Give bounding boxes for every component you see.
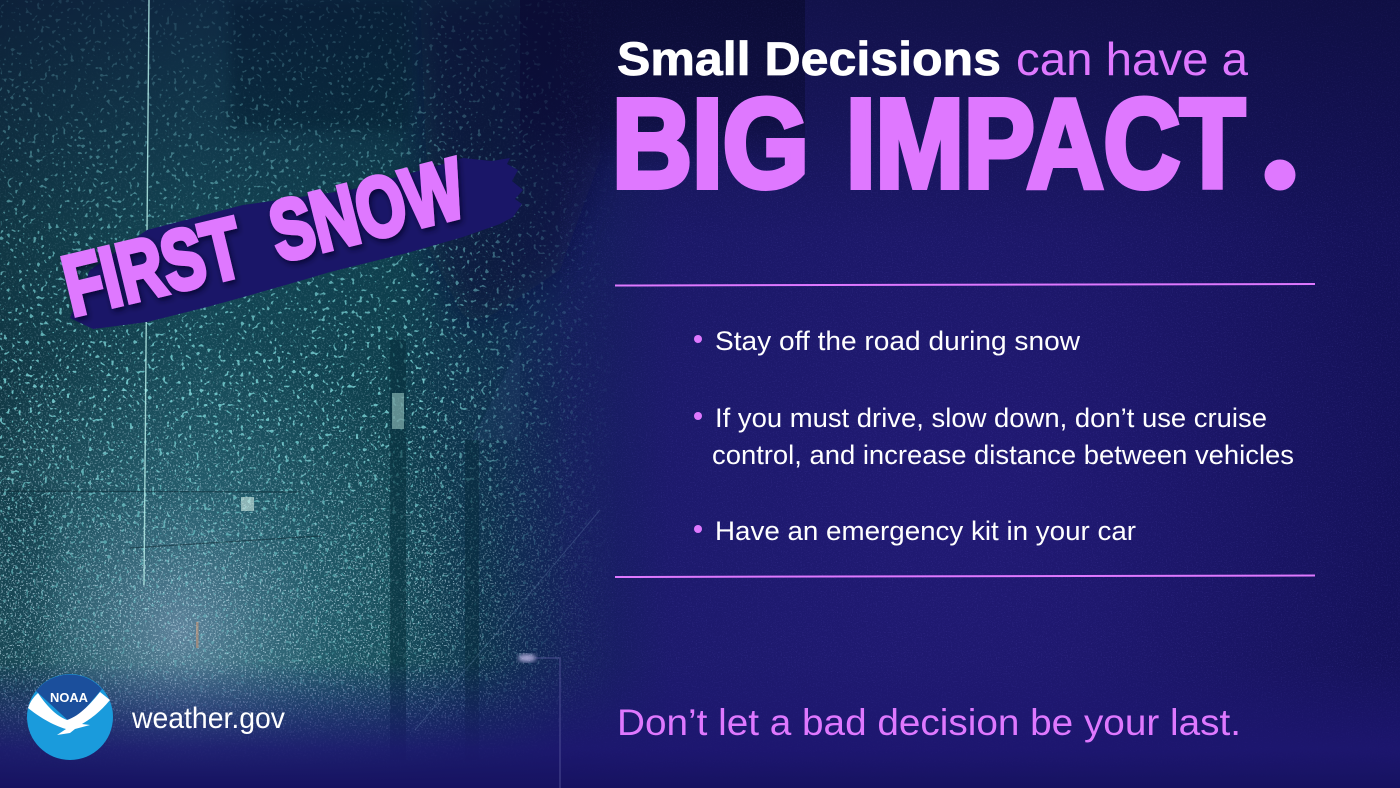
website: weather.gov (131, 702, 285, 735)
bullet 1: Stay off the road during snow (715, 326, 1081, 356)
noaa logo (27, 674, 113, 760)
closing message: Don’t let a bad decision be your last. (617, 702, 1241, 743)
noaa wordmark: NOAA (50, 690, 89, 705)
title line: can have a (1016, 33, 1248, 85)
title line: Small Decisions (617, 32, 1001, 85)
bottom divider (615, 576, 1315, 577)
bird swoosh (28, 692, 110, 735)
brush stroke (70, 158, 523, 329)
top divider (615, 284, 1315, 286)
big impact headline: BIG (612, 73, 809, 214)
title line (617, 32, 1248, 85)
bullet 2 (694, 403, 1294, 470)
first snow label: FIRST (54, 200, 252, 334)
bullet list (694, 326, 1294, 546)
big impact headline: IMPACT (846, 73, 1245, 214)
bullet 2: control, and increase distance between vehicles (712, 440, 1294, 470)
first snow banner (54, 141, 523, 334)
bullet 3: Have an emergency kit in your car (715, 516, 1136, 546)
first snow label (54, 141, 474, 334)
bullet 2: If you must drive, slow down, don’t use cruise (715, 403, 1267, 433)
big impact headline (612, 73, 1296, 214)
first snow label: SNOW (261, 141, 474, 280)
